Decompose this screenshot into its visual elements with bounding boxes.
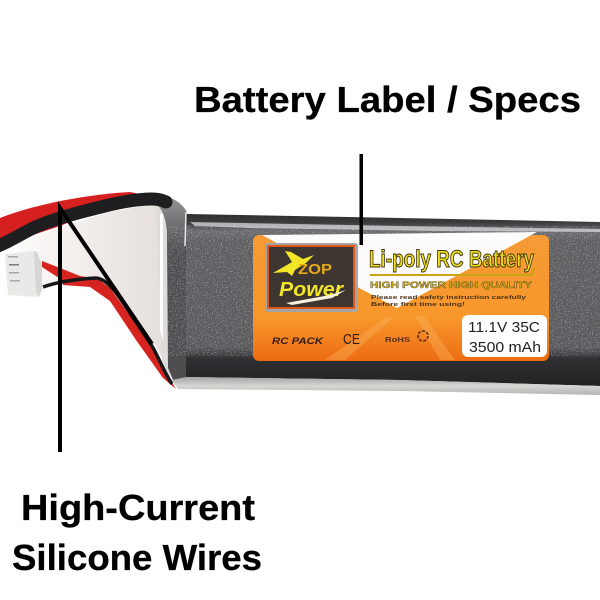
battery cell corner and side [155,196,187,380]
red silicone main wire [0,192,140,246]
spec box: 11.1V 35C [468,319,540,336]
title underline [370,268,534,275]
product title: Li-poly RC Battery [369,246,535,273]
pointer lines: silicone wires [60,208,152,452]
highlight on top edge [190,222,600,232]
road rays [325,316,455,360]
pointer line: battery label [360,154,363,245]
black silicone main wire [0,199,166,246]
small safety text: Please read safety instruction carefully [371,295,527,301]
balance lead: black wire [43,278,172,384]
battery photo [0,192,600,395]
heading: silicone wires: Silicone Wires [12,537,262,578]
battery body [186,214,600,386]
heading: battery label: Battery Label / Specs [194,79,581,120]
CE mark: CE [343,331,360,348]
RC PACK mark: RC PACK [272,336,324,347]
recycle icon [418,331,428,341]
heading: silicone wires: High-Current [21,487,255,528]
plane icon [273,251,314,276]
battery label [253,232,549,361]
translucent heat-shrink gusset [156,205,170,378]
tagline: HIGH POWER HIGH QUALITY [370,280,532,290]
battery label: Before first time using! [371,302,465,308]
logo [265,243,358,312]
spec box [462,315,547,357]
body speckle texture [168,226,600,356]
pleat highlight [185,212,186,246]
RoHS mark: RoHS [385,335,410,344]
silver bottom edge [172,377,600,395]
spec box: 3500 mAh [469,339,541,356]
gusset background between wires and battery [0,202,172,376]
white panel on label [262,232,537,308]
logo: Power [279,279,344,301]
balance connector [5,251,42,297]
logo: ZOP [298,261,332,278]
heading: silicone wires [12,487,262,578]
balance lead: red wire [42,261,176,389]
